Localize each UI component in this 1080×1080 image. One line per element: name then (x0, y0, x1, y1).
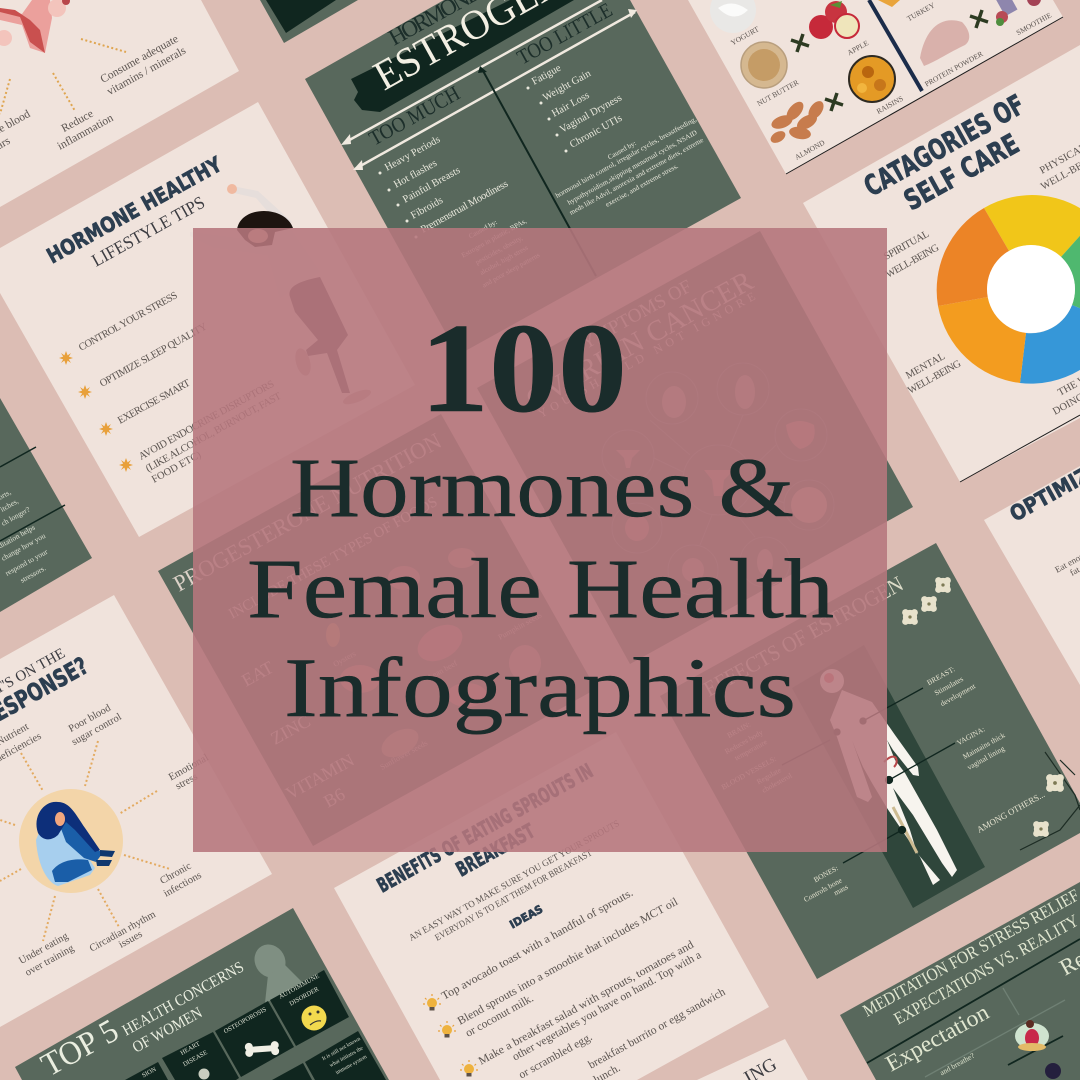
heading: PROGESTERONE NUTRITION (169, 428, 446, 596)
panel: progesterone nutrition: Oysters (332, 649, 357, 669)
too much: Painful Breasts (401, 165, 462, 206)
panel: top 5 health concerns: HEALTH CONCERNS (120, 959, 247, 1039)
callout labels: mass (832, 882, 850, 897)
too much: alcohol, high stress (479, 244, 530, 277)
body panel (792, 645, 985, 908)
callout lines (782, 688, 955, 863)
foods (326, 548, 541, 763)
labels: Chronic (158, 861, 194, 887)
panel: top 5 health concerns: OF WOMEN (130, 1004, 206, 1056)
too much: Premenstrual Moodiness (419, 178, 510, 236)
text: tips: Reduce (60, 108, 96, 135)
panel: top 5 health concerns: what initiates the (329, 1045, 365, 1069)
heading: EFFECTS OF ESTROGEN (699, 571, 907, 701)
symptom icons (616, 375, 827, 582)
callout labels (720, 664, 1007, 904)
too much (365, 81, 542, 289)
nutrient labels: ZINC (267, 711, 314, 748)
callout labels: vaginal lining (965, 744, 1006, 772)
callout labels: VAGINA: (955, 724, 986, 747)
labels: infections (162, 870, 204, 900)
too little: Hair Loss (550, 90, 591, 120)
icon: heart (198, 1068, 210, 1080)
icon: sad emoji (302, 1006, 326, 1030)
too little: meds like Advil, anorexia and extreme diets, extreme (568, 136, 705, 217)
too much: Heavy Periods (383, 134, 442, 174)
food: nut butter (741, 42, 787, 88)
too much: pesticides, obesity, (474, 234, 524, 267)
title line 2: Female Health (247, 542, 834, 636)
labels: ALMOND (793, 138, 827, 162)
ideas list: breakfast burrito or egg sandwich (586, 986, 728, 1072)
too little: Fatigue (530, 63, 563, 88)
labels: Poor blood (67, 702, 113, 735)
callout labels: BREAST: (925, 664, 956, 687)
panel: progesterone nutrition: Sunflower seeds (379, 738, 429, 772)
column headings: Expectation (881, 999, 994, 1076)
callout labels: BRAIN: (725, 720, 752, 740)
panel: categories of self care: SELF CARE (898, 127, 1025, 217)
ideas list: Make a breakfast salad with sprouts, tomatoes and (477, 939, 696, 1068)
labels: RAISINS (875, 94, 905, 116)
tips list: AVOID ENDOCRINE DISRUPTORS (137, 379, 276, 463)
intro: EVERYDAY IS TO EAT THEM FOR BREAKFAST (434, 848, 594, 944)
panel: green meditation card left (0, 398, 92, 612)
text: stressors. (19, 563, 47, 585)
too much: and poor sleep patterns (481, 251, 542, 289)
panel: top 5 health concerns: HEART (179, 1040, 201, 1057)
callout labels: Controls bone (802, 875, 844, 904)
hair (237, 211, 293, 247)
callout labels: temperature (733, 737, 769, 762)
panel: progesterone nutrition: Pumpkin seeds (497, 610, 543, 642)
food: smoothie (996, 0, 1041, 26)
text: tips (0, 33, 188, 160)
title line 3: Infographics (284, 641, 796, 735)
icon: meditating woman (1015, 1020, 1049, 1051)
too little (513, 0, 705, 217)
too little: Chronic UTIs (568, 113, 624, 151)
callout labels: BONES: (812, 863, 840, 884)
brush banner (351, 0, 574, 112)
labels (729, 0, 1053, 162)
labels: PROTEIN POWDER (923, 49, 984, 89)
number: 100 (420, 297, 627, 439)
panel: hormone estrogen (305, 0, 741, 355)
labels: stress (174, 771, 200, 792)
tips list: CONTROL YOUR STRESS (77, 290, 180, 354)
heading: HORMONE HEALTHY (43, 152, 226, 268)
food: protein powder (920, 20, 969, 66)
shoes (293, 347, 313, 377)
panel: top 5 health concerns: DISORDER (288, 985, 321, 1008)
callout labels: Reduces body (723, 728, 765, 756)
panel: benefits of sprouts: BREAKFAST (452, 819, 539, 881)
labels: Under eating (17, 930, 71, 967)
text: tips: inflammation (56, 112, 116, 153)
too much: Caused by: (467, 218, 499, 240)
tips list: EXERCISE SMART (116, 377, 193, 427)
ideas list: or scrambled egg. (517, 1031, 595, 1080)
too little: exercise, and extreme stress. (604, 162, 680, 209)
labels (882, 142, 1080, 418)
face (248, 229, 268, 243)
panel: uterus tips card (0, 0, 239, 207)
callout labels: Regulate (755, 765, 783, 786)
table cells (125, 970, 386, 1080)
icons: bulbs (423, 994, 478, 1076)
panel: progesterone nutrition (158, 414, 596, 846)
heading: YOU SHOULD NOT IGNORE (536, 289, 758, 421)
callout labels: cholesterol (760, 771, 793, 795)
ideas list: or coconut milk. (464, 992, 536, 1040)
icon: woman head (1045, 1063, 1061, 1079)
food: raisins (849, 56, 895, 102)
too little: Caused by: (606, 139, 638, 161)
callout labels: Maintains thick (961, 730, 1007, 761)
labels: over training (24, 943, 77, 979)
text: ch longer? (0, 504, 32, 528)
callout labels: development (939, 681, 978, 708)
tips list: FOOD ETC) (150, 449, 204, 486)
icon: seated woman (19, 789, 123, 893)
panel: bottom card (697, 1039, 808, 1080)
flowers (902, 577, 1080, 850)
labels: YOGURT (729, 24, 761, 47)
panel: small green card top (260, 0, 358, 43)
too little: Weight Gain (541, 68, 594, 104)
overlay panel (193, 228, 887, 852)
ideas list: Blend sprouts into a smoothie that includes MCT oil (456, 896, 680, 1028)
silhouette (249, 939, 305, 1003)
leggings (289, 277, 350, 393)
ideas list (440, 887, 728, 1080)
intro: AN EASY WAY TO MAKE SURE YOU GET YOUR SPROUTS (408, 819, 621, 944)
panel: optimize card (984, 457, 1080, 685)
nutrient labels (238, 657, 358, 811)
divider (482, 69, 596, 276)
labels: MENTAL (904, 351, 947, 382)
labels: Circadian rhythm (88, 909, 158, 955)
food: almonds (769, 98, 827, 145)
tips list: OPTIMIZE SLEEP QUALITY (98, 321, 210, 390)
arm and sleeve (232, 186, 292, 228)
labels: APPLE (846, 38, 870, 57)
heading: BENEFITS OF EATING SPROUTS IN (373, 759, 597, 897)
labels: TURKEY (905, 0, 937, 23)
panel: hormone healthy lifestyle tips (0, 102, 415, 537)
labels: WELL-BEING (884, 242, 941, 281)
subheading: LIFESTYLE TIPS (88, 192, 208, 270)
heading: OVARIAN CANCER (521, 265, 759, 416)
labels: WELL-BEING (906, 358, 963, 397)
labels: NUT BUTTER (755, 78, 800, 108)
callout labels: Stimulates (933, 674, 965, 697)
subheading: IDEAS (507, 902, 545, 931)
labels: SPIRITUAL (882, 229, 931, 263)
note: AMONG OTHERS... (975, 789, 1046, 835)
too much: Estrogen in plastic, BPAs, (460, 217, 528, 259)
nutrient labels: EAT (238, 657, 277, 690)
panel: benefits of sprouts (334, 732, 769, 1080)
panel: top 5 health concerns: DISEASE (182, 1049, 209, 1068)
food: yogurt (710, 0, 756, 33)
panel: top 5 health concerns: SION (141, 1066, 158, 1079)
divider (869, 0, 922, 91)
food: apple (809, 1, 859, 39)
panel: top 5 health concerns: AUTOIMMUNE (278, 973, 321, 1001)
panel: top 5 health concerns: immune system (335, 1054, 369, 1076)
panel: symptoms of ovarian cancer (477, 231, 913, 664)
labels: Emotional (167, 752, 211, 783)
title line 1: Hormones & (290, 441, 794, 535)
text: respond to your (4, 547, 50, 578)
too little: hormonal birth control, irregular cycles, breastfeeding, (554, 115, 698, 200)
too little: hypothyroidism,skipping menstrual cycles, NSAID (566, 128, 699, 207)
body silhouette (820, 669, 957, 885)
panel: top 5 health concerns: It is still not known (321, 1036, 362, 1062)
labels (0, 702, 211, 979)
donut chart (937, 195, 1080, 384)
symptom diagram (602, 363, 834, 595)
text: and breathe? (938, 1051, 977, 1077)
callout labels: BLOOD VESSELS: (720, 754, 778, 792)
too much: Hot flashes (392, 158, 439, 191)
too much: TOO MUCH (365, 81, 464, 150)
text: change how you (0, 531, 47, 563)
shirt (190, 228, 320, 298)
illustration: jumping woman (190, 184, 373, 407)
panel: progesterone nutrition: INCLUDE THESE TYPES OF FOODS (226, 494, 440, 622)
nutrient labels: B6 (320, 784, 348, 811)
panel: snack pairings (688, 0, 1063, 174)
panel: categories of self care (803, 45, 1080, 482)
labels: SMOOTHIE (1015, 10, 1053, 37)
icon: uterus (0, 0, 70, 53)
panel: meditation expectations vs reality (840, 882, 1080, 1080)
nutrient labels: VITAMIN (282, 750, 358, 803)
heading: SYMPTOMS OF (569, 276, 695, 359)
text (0, 487, 50, 585)
labels: sugar control (70, 712, 124, 748)
labels: issues (117, 929, 144, 951)
tips list: (LIKE ALCOHOL, BURNOUT, FAST (144, 391, 284, 475)
ideas list: other vegetables you have on hand. Top with a (511, 949, 703, 1063)
title (247, 297, 834, 735)
text: tips: vitamins / minerals (105, 45, 188, 98)
tips list (59, 290, 284, 486)
panel: progesterone nutrition: Lean beef (427, 658, 459, 682)
panel: stress response card (0, 595, 272, 1027)
text: tips: Consume adequate (99, 33, 181, 86)
icon: bone (245, 1041, 279, 1057)
panel: top 5 health concerns: OSTEOPOROSIS (223, 1006, 268, 1035)
ideas list: Top avocado toast with a handful of sprouts. (440, 887, 635, 1003)
panel: top 5 health concerns (15, 908, 389, 1080)
food: turkey (878, 0, 900, 7)
too much: Fibroids (409, 195, 445, 222)
too little: Vaginal Dryness (558, 92, 624, 136)
plus signs (791, 10, 988, 111)
arrows: header rules (344, 0, 635, 169)
panel: effects of estrogen (660, 543, 1080, 979)
